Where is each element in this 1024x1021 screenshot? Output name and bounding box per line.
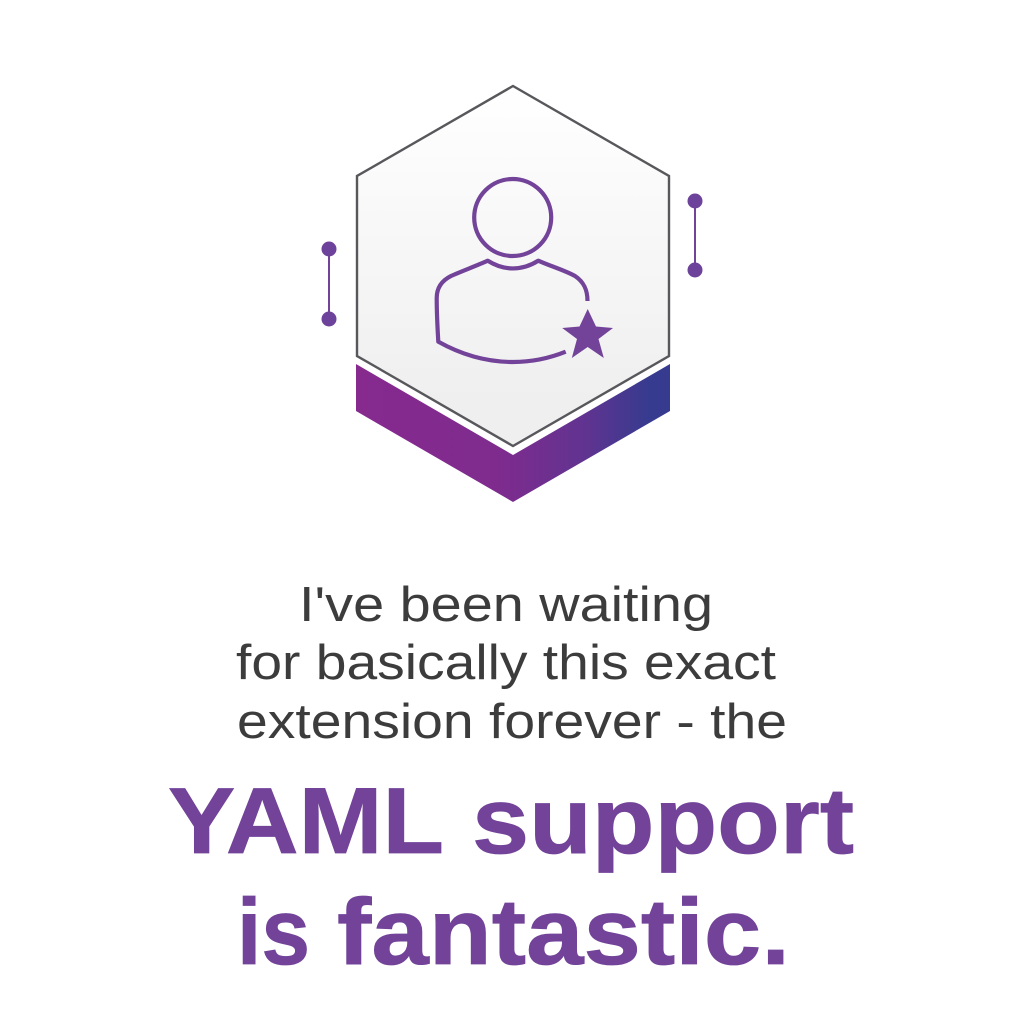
- quote text: I've been waiting: [299, 578, 713, 632]
- quote text: [236, 578, 787, 749]
- quote text: for basically this exact: [236, 636, 776, 690]
- hexagon base band: [356, 364, 670, 502]
- highlighted headline: fantastic.: [337, 879, 790, 984]
- highlighted headline: YAML: [168, 768, 444, 873]
- decorative connector right: [688, 194, 702, 278]
- hexagon badge: [357, 86, 669, 446]
- highlighted headline: is: [237, 879, 310, 984]
- icon: person with star: [437, 179, 613, 362]
- highlighted headline: support: [472, 768, 854, 873]
- highlighted headline: [168, 768, 854, 984]
- quote text: extension forever - the: [237, 695, 787, 749]
- decorative connector left: [322, 242, 336, 326]
